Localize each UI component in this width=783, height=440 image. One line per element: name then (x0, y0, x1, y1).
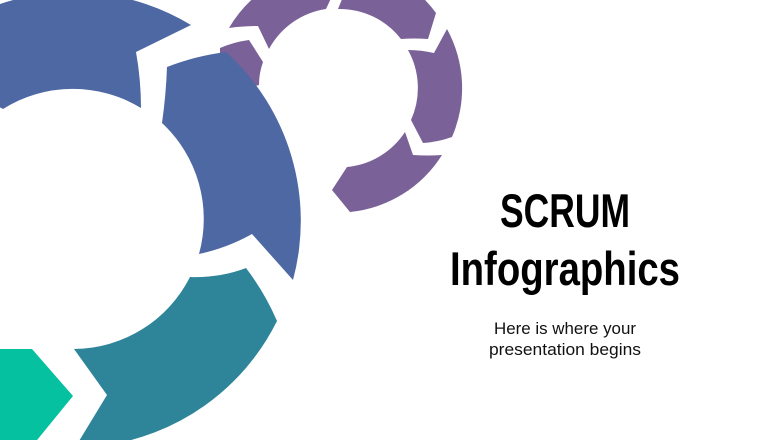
ring segment: green arrow (0, 349, 73, 440)
subtitle (489, 320, 641, 359)
ring segment: bottom teal (74, 268, 277, 440)
title line 1: SCRUM (500, 184, 630, 237)
small purple cycle ring (220, 0, 462, 212)
title (450, 184, 680, 295)
ring segment: right (408, 29, 462, 143)
ring segment: top right (338, 0, 436, 39)
title line 2: Infographics (450, 242, 680, 295)
large cycle ring (0, 0, 301, 440)
ring segment: left, behind blue ring (220, 40, 263, 90)
ring segment: top blue (0, 0, 191, 109)
subtitle line 1: Here is where your (494, 320, 637, 338)
ring segment: top left (229, 0, 333, 49)
ring segment: bottom (332, 132, 442, 212)
ring segment: right blue (162, 52, 301, 280)
subtitle line 2: presentation begins (489, 341, 641, 359)
